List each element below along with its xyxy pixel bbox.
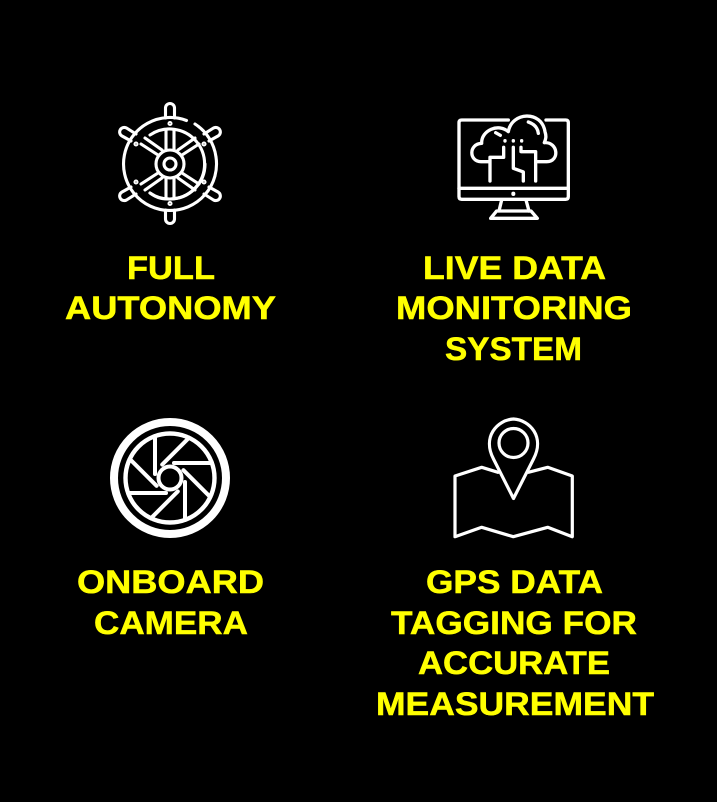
- icon: monitor with cloud: [459, 116, 568, 218]
- heading: live data monitoring system: LIVE DATA: [423, 250, 606, 286]
- icon: camera shutter: [114, 422, 226, 534]
- panel: full autonomy: [65, 104, 276, 326]
- panel: onboard camera: [77, 422, 264, 641]
- heading: gps data tagging for accurate measurement: MEASUREMENT: [376, 686, 654, 722]
- heading: gps data tagging for accurate measurement: [376, 564, 654, 722]
- heading: onboard camera: CAMERA: [94, 605, 248, 641]
- heading: gps data tagging for accurate measurement: GPS DATA: [426, 564, 603, 600]
- heading: gps data tagging for accurate measurement: TAGGING FOR: [391, 605, 637, 641]
- icon: map with pin: [455, 419, 572, 537]
- panel: live data monitoring system: [396, 116, 632, 367]
- heading: live data monitoring system: SYSTEM: [445, 331, 582, 367]
- heading: full autonomy: [65, 250, 276, 326]
- heading: gps data tagging for accurate measurement: ACCURATE: [418, 645, 610, 681]
- heading: full autonomy: FULL: [127, 250, 215, 286]
- heading: full autonomy: AUTONOMY: [65, 290, 276, 326]
- heading: onboard camera: ONBOARD: [77, 564, 264, 600]
- icon: ship wheel: [120, 104, 220, 224]
- heading: live data monitoring system: [396, 250, 632, 367]
- heading: onboard camera: [77, 564, 264, 641]
- heading: live data monitoring system: MONITORING: [396, 290, 632, 326]
- panel: gps data tagging: [376, 419, 654, 722]
